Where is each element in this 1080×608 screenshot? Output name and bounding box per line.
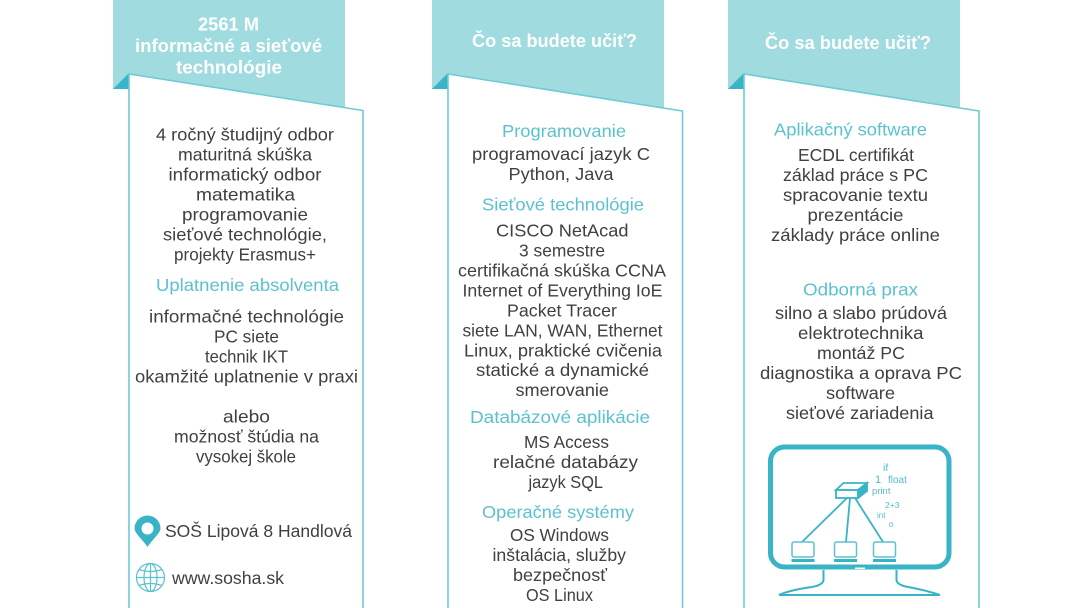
text block: network technologies: siete LAN, WAN, Ethernet bbox=[462, 320, 663, 340]
banner: column 1: informačné a sieťové bbox=[135, 35, 322, 56]
heading: application software: Aplikačný software bbox=[774, 120, 927, 140]
code keywords: float bbox=[888, 475, 907, 486]
heading: operating systems: Operačné systémy bbox=[482, 502, 634, 522]
text block: graduate careers: alebo bbox=[223, 406, 270, 426]
banner: column 2 bbox=[432, 0, 664, 112]
text block: programming: Python, Java bbox=[508, 164, 614, 184]
banner: column 1: 2561 M bbox=[198, 14, 259, 34]
text block: study programme: sieťové technológie, bbox=[163, 225, 327, 245]
banner: column 2: Čo sa budete učiť? bbox=[472, 30, 637, 51]
icon: map pin bbox=[134, 516, 160, 547]
text block: application software: spracovanie textu bbox=[783, 185, 928, 205]
text block: professional practice: elektrotechnika bbox=[798, 323, 924, 343]
text block: professional practice: software bbox=[826, 383, 895, 403]
text block: graduate careers bbox=[135, 306, 358, 466]
text block: network technologies: Linux, praktické cvičenia bbox=[464, 340, 662, 360]
text block: professional practice bbox=[760, 303, 962, 423]
website: www.sosha.sk bbox=[171, 568, 284, 588]
text block: graduate careers: možnosť štúdia na bbox=[174, 426, 319, 446]
text block: professional practice: montáž PC bbox=[817, 343, 905, 363]
text block: operating systems: OS Windows bbox=[510, 525, 609, 545]
card outline: column 3 bbox=[744, 74, 979, 608]
code keywords: if bbox=[883, 462, 888, 474]
text block: database applications: jazyk SQL bbox=[528, 472, 603, 492]
panel: column 2 bbox=[432, 0, 682, 608]
text block: network technologies: CISCO NetAcad bbox=[496, 220, 628, 240]
computers bbox=[792, 542, 896, 562]
code keywords: 2+3 bbox=[885, 500, 900, 510]
text block: application software bbox=[771, 145, 940, 245]
card outline: column 1 bbox=[129, 74, 363, 608]
text block: network technologies: Packet Tracer bbox=[507, 300, 617, 320]
text block: professional practice: diagnostika a oprava PC bbox=[760, 363, 962, 383]
card outline: column 2 bbox=[448, 74, 682, 608]
address: SOŠ Lipová 8 Handlová bbox=[165, 520, 352, 541]
heading: professional practice: Odborná prax bbox=[803, 280, 918, 300]
text block: network technologies: Internet of Everything IoE bbox=[462, 280, 662, 300]
icon: monitor with network bbox=[770, 447, 949, 595]
text block: network technologies: smerovanie bbox=[516, 380, 609, 400]
text block: study programme bbox=[156, 125, 334, 265]
heading: graduate careers: Uplatnenie absolventa bbox=[156, 275, 339, 295]
banner: column 3 bbox=[728, 0, 960, 112]
banner: column 1 bbox=[113, 0, 345, 112]
text block: study programme: projekty Erasmus+ bbox=[174, 245, 316, 265]
text block: application software: ECDL certifikát bbox=[798, 145, 914, 165]
panel: column 3 bbox=[728, 0, 979, 608]
text block: database applications bbox=[493, 432, 638, 492]
text block: study programme: programovanie bbox=[182, 205, 308, 225]
text block: professional practice: sieťové zariadenia bbox=[786, 403, 934, 423]
banner: column 1: technológie bbox=[176, 56, 282, 78]
text block: database applications: relačné databázy bbox=[493, 452, 638, 472]
code keywords: print bbox=[872, 486, 891, 497]
code keywords bbox=[872, 462, 907, 529]
text block: graduate careers: vysokej škole bbox=[196, 446, 296, 466]
text block: network technologies: 3 semestre bbox=[519, 240, 605, 260]
text block: network technologies: statické a dynamické bbox=[476, 360, 649, 380]
text block: application software: prezentácie bbox=[808, 205, 904, 225]
code keywords: 1 bbox=[875, 474, 881, 486]
text block: graduate careers: informačné technológie bbox=[149, 306, 344, 326]
code keywords: 0 bbox=[889, 520, 893, 529]
text block: operating systems bbox=[492, 525, 626, 605]
banner: column 3: Čo sa budete učiť? bbox=[765, 32, 931, 53]
text block: application software: základ práce s PC bbox=[783, 165, 928, 185]
text block: graduate careers: okamžité uplatnenie v praxi bbox=[135, 366, 358, 386]
network switch bbox=[836, 483, 867, 498]
text block: database applications: MS Access bbox=[524, 432, 609, 452]
text block: application software: základy práce online bbox=[771, 225, 940, 245]
text block: operating systems: bezpečnosť bbox=[513, 565, 607, 585]
network links bbox=[802, 498, 883, 542]
text block: operating systems: inštalácia, služby bbox=[492, 545, 626, 565]
heading: network technologies: Sieťové technológie bbox=[482, 194, 644, 214]
text block: programming: programovací jazyk C bbox=[472, 144, 650, 164]
text block: study programme: informatický odbor bbox=[168, 165, 322, 185]
text block: professional practice: silno a slabo prúdová bbox=[775, 303, 947, 323]
icon: globe bbox=[136, 564, 164, 592]
text block: study programme: 4 ročný študijný odbor bbox=[156, 125, 334, 145]
heading: database applications: Databázové aplikácie bbox=[470, 407, 650, 427]
text block: study programme: matematika bbox=[196, 185, 295, 205]
text block: graduate careers: PC siete bbox=[214, 326, 279, 346]
text block: network technologies bbox=[458, 220, 666, 400]
text block: network technologies: certifikačná skúška CCNA bbox=[458, 260, 666, 280]
heading: programming: Programovanie bbox=[502, 121, 626, 141]
panel: column 1 bbox=[113, 0, 363, 608]
code keywords: int bbox=[877, 511, 886, 520]
text block: programming bbox=[472, 144, 650, 184]
text block: operating systems: OS Linux bbox=[526, 585, 593, 605]
text block: study programme: maturitná skúška bbox=[178, 145, 312, 165]
text block: graduate careers: technik IKT bbox=[205, 346, 288, 366]
